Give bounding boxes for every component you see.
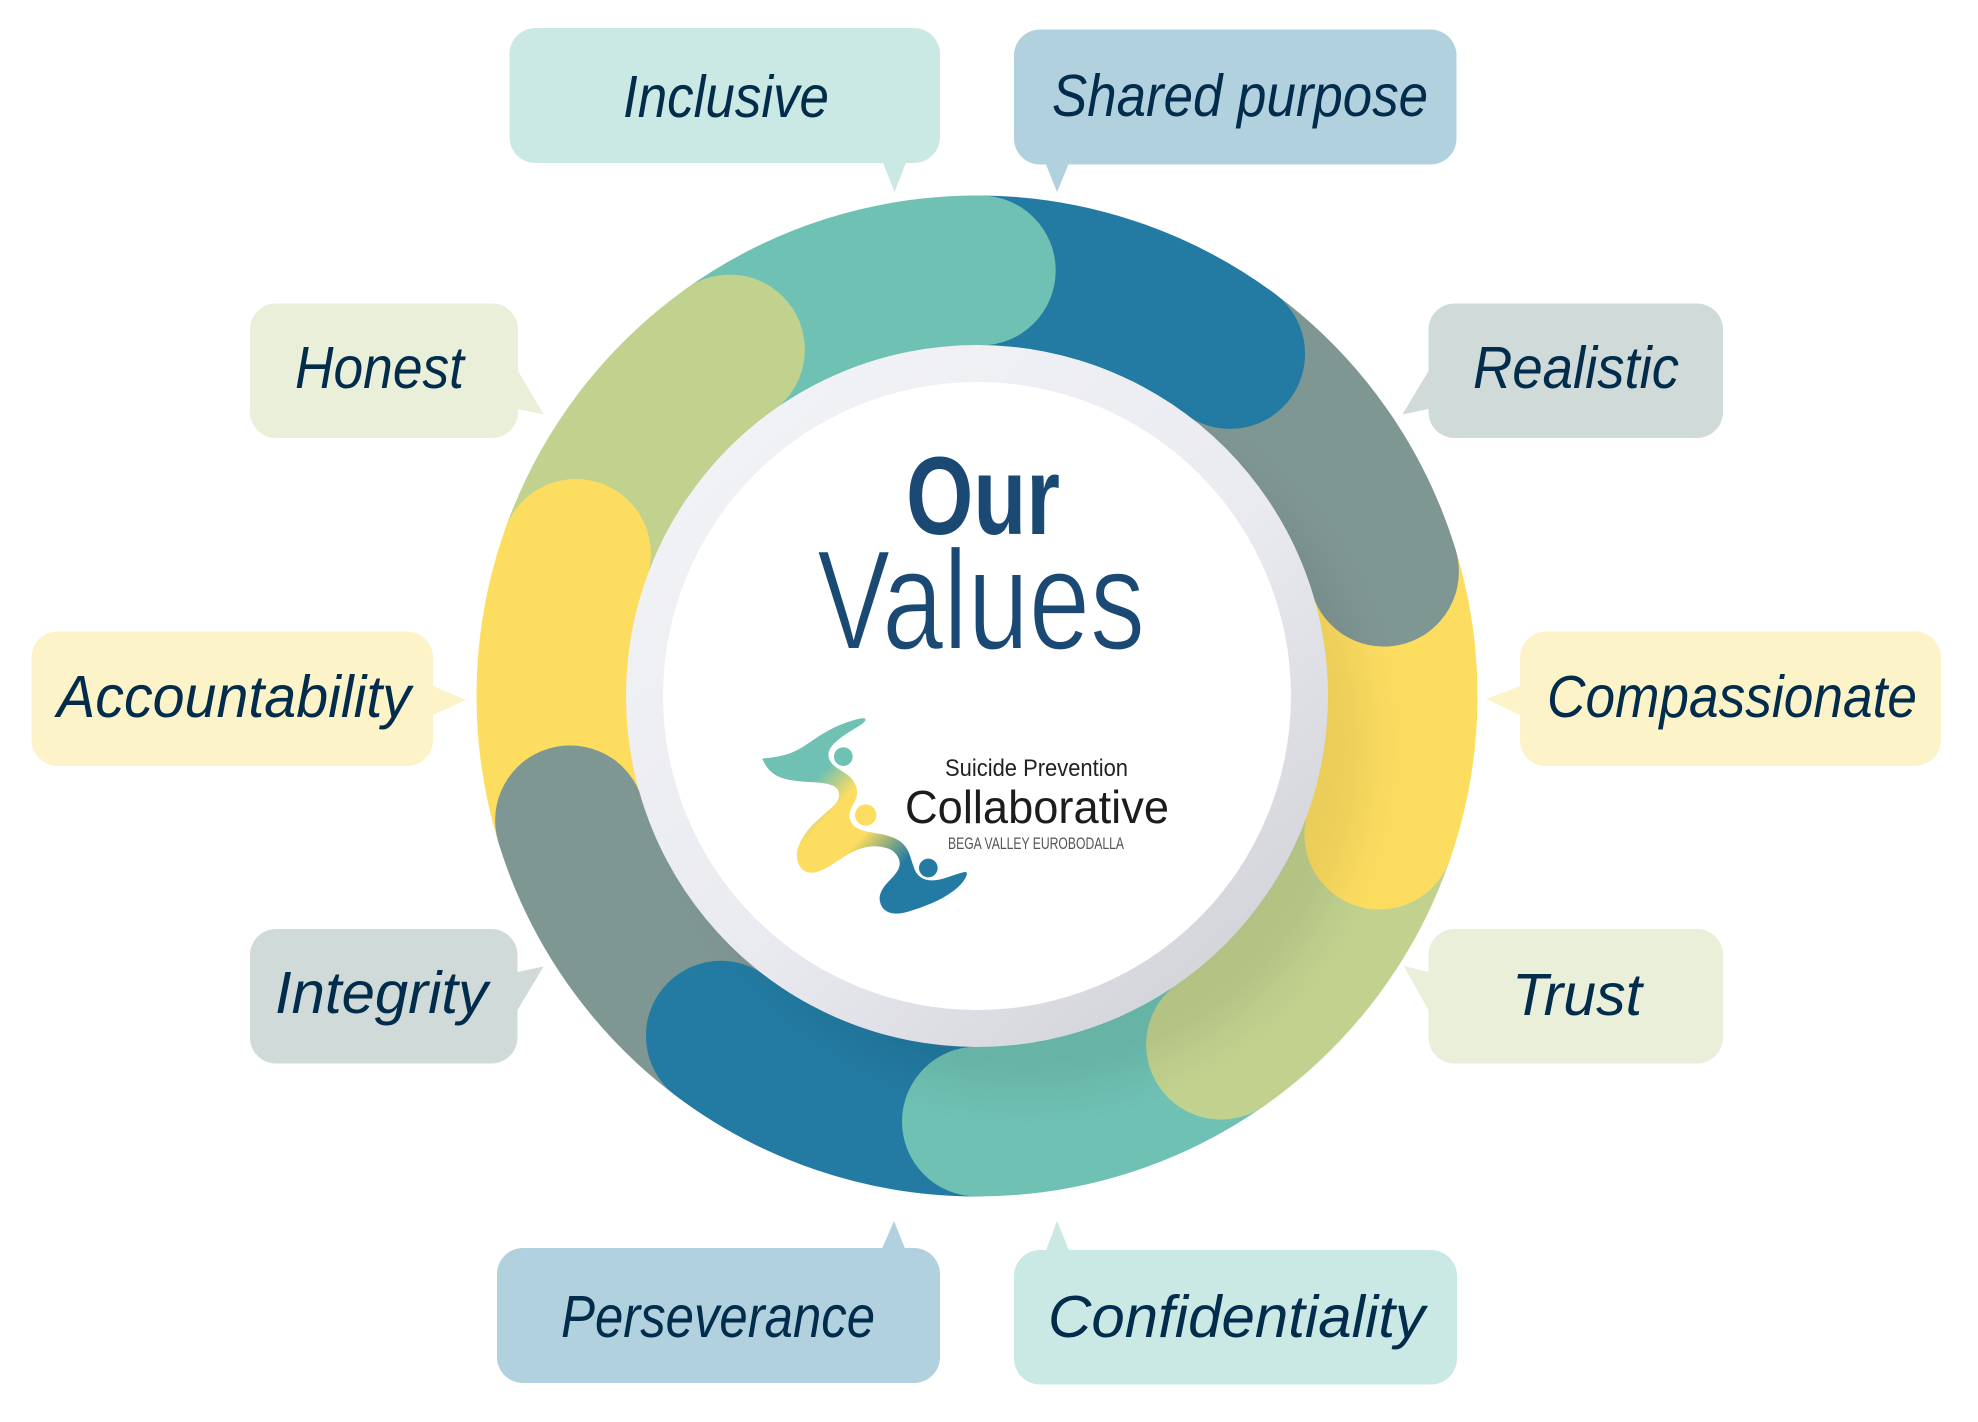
- segment: grey left: [570, 820, 721, 1036]
- bubble: Compassionate: [1486, 632, 1941, 766]
- segment: teal bottom: [977, 1045, 1221, 1122]
- bubble: Honest: [250, 304, 544, 438]
- bubble: Realistic: [1402, 304, 1723, 438]
- segment: blue bottom left: [721, 1036, 977, 1122]
- bubble: Shared purpose: [1014, 30, 1456, 192]
- heading word: Values: Values: [817, 521, 1145, 680]
- heading word: Our: Our: [906, 435, 1060, 558]
- segment: yellow right: [1379, 572, 1402, 834]
- bubble: Confidentiality: [1014, 1221, 1457, 1384]
- label: Accountability: Accountability: [54, 664, 414, 730]
- bubble: Integrity: [250, 929, 544, 1064]
- logo text: Bega Valley Eurobodalla: BEGA VALLEY EUROBODALLA: [948, 835, 1124, 853]
- label: Honest: Honest: [295, 335, 466, 401]
- segment: green upper left: [576, 350, 730, 554]
- segment: green lower right: [1221, 834, 1379, 1045]
- logo: Suicide Prevention Collaborative: [762, 718, 1169, 914]
- heading: Our Values: [817, 435, 1145, 680]
- segment: grey right: [1230, 354, 1384, 572]
- label: Integrity: Integrity: [275, 960, 492, 1026]
- logo text: Suicide Prevention: Suicide Prevention: [945, 755, 1128, 782]
- bubble: Inclusive: [510, 28, 940, 192]
- label: Realistic: Realistic: [1473, 335, 1679, 401]
- ring: values wheel: [495, 196, 1459, 1196]
- logo mark: ribbon and three figures: [762, 718, 967, 914]
- bubble: Perseverance: [497, 1221, 940, 1383]
- centre disc: [626, 345, 1328, 1047]
- disc shadow: [825, 568, 1371, 1085]
- label: Perseverance: Perseverance: [561, 1284, 875, 1350]
- segment: blue upper right: [981, 270, 1230, 354]
- segment: teal top: [730, 270, 981, 350]
- label: Compassionate: Compassionate: [1547, 664, 1917, 730]
- logo text: Collaborative: Collaborative: [905, 781, 1169, 833]
- bubble: Trust: [1404, 929, 1723, 1064]
- segment: yellow left: [552, 554, 576, 820]
- label: Inclusive: Inclusive: [623, 64, 829, 130]
- label: Trust: Trust: [1512, 962, 1645, 1028]
- label: Shared purpose: Shared purpose: [1052, 63, 1428, 129]
- rounded segment heads: [495, 196, 1459, 1196]
- label: Confidentiality: Confidentiality: [1048, 1284, 1429, 1350]
- bubble: Accountability: [32, 632, 466, 766]
